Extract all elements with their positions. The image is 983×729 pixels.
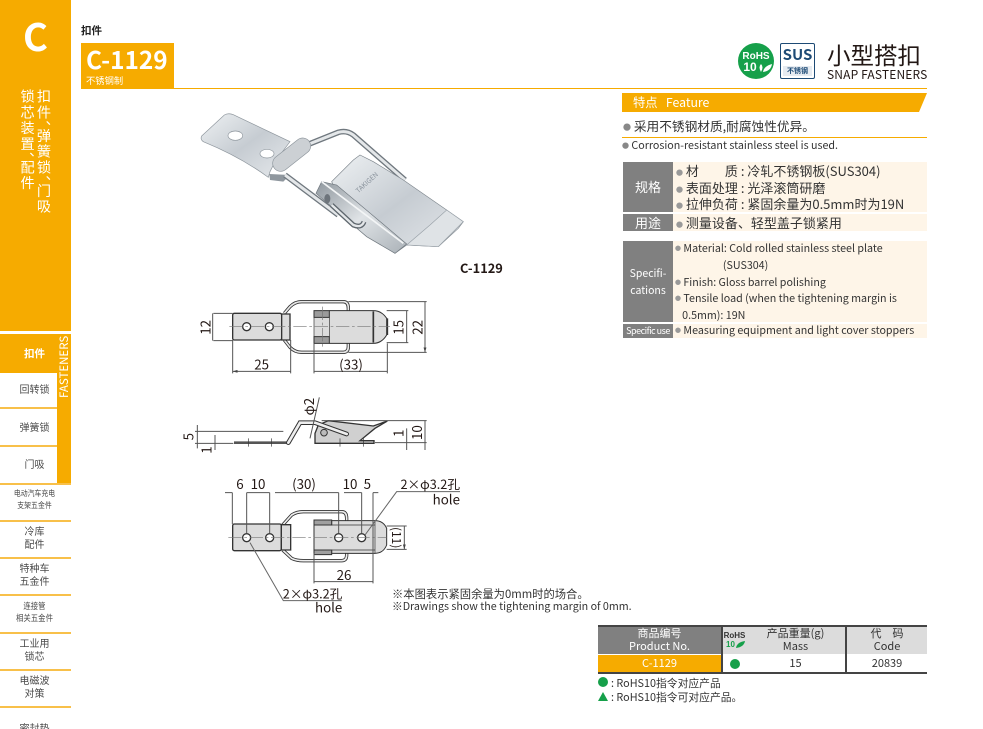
- spec list: [673, 162, 927, 212]
- feature text English: ● Corrosion-resistant stainless steel is used.: [622, 138, 838, 153]
- nav item: 相关五金件: [16, 612, 53, 624]
- legend circle text: : RoHS10指令对应产品: [611, 675, 721, 691]
- active nav item: 扣件: [24, 346, 45, 361]
- dimension labels: [178, 398, 426, 454]
- side view technical drawing: [178, 397, 427, 454]
- label: specifications: [623, 241, 673, 322]
- cell: product no: [598, 655, 721, 672]
- legend triangle: [598, 692, 608, 701]
- dimension labels: 1: [388, 430, 407, 437]
- cell: code: 20839: [872, 655, 902, 671]
- header: mass: [746, 627, 845, 654]
- panel: English specifications: [623, 241, 927, 338]
- header: RoHS: RoHS: [724, 631, 745, 640]
- nav item: 电磁波: [20, 672, 50, 687]
- header: mass: 产品重量(g): [767, 625, 824, 641]
- nav item: [14, 488, 55, 511]
- label: specs: 规格: [635, 177, 661, 196]
- label: specs: [623, 162, 673, 212]
- nav item: [20, 672, 50, 700]
- open view technical drawing: [225, 474, 460, 617]
- dimension labels: 15: [388, 320, 407, 335]
- use text: ● 测量设备、轻型盖子锁紧用: [676, 213, 842, 232]
- header: RoHS: 10: [726, 640, 735, 649]
- nav item: [24, 523, 44, 550]
- product code: C-1129: [86, 42, 168, 77]
- dimension labels: φ2: [299, 398, 318, 415]
- nav item: 支架五金件: [17, 500, 52, 511]
- badge: RoHS 10: 10: [743, 60, 757, 74]
- sidebar vertical category text: [18, 89, 54, 215]
- dimension labels: 5: [178, 433, 197, 440]
- dimension labels: 26: [337, 565, 351, 584]
- nav item: 工业用: [20, 635, 50, 650]
- panel: Chinese specifications: [623, 161, 927, 232]
- dimension labels: 10: [407, 425, 426, 440]
- product title English: SNAP FASTENERS: [827, 66, 927, 83]
- nav item: [20, 635, 50, 662]
- dimension lines: [195, 397, 427, 450]
- active nav item: [0, 334, 57, 373]
- drawing note: [392, 586, 632, 614]
- dimension labels: 2×φ3.2孔: [400, 474, 460, 493]
- label: use: [623, 214, 673, 231]
- nav item: 门吸: [24, 456, 44, 471]
- dimension labels: 1: [196, 446, 215, 454]
- legend: [598, 675, 742, 705]
- sidebar navigation: [0, 334, 72, 729]
- dimension labels: 10: [251, 474, 265, 493]
- dimension labels: 5: [364, 474, 371, 493]
- nav item: 特种车: [20, 560, 50, 575]
- cell: mass: 15: [789, 655, 802, 671]
- dimension labels: 2×φ3.2孔: [283, 583, 343, 602]
- nav item: 锁芯: [24, 648, 44, 662]
- label: specifications: cations: [630, 283, 666, 298]
- dimension labels: (11): [388, 527, 405, 548]
- header: product no: [598, 627, 721, 654]
- badge: SUS: [780, 43, 815, 79]
- spec list: ● 表面处理 : 光泽滚筒研磨: [676, 178, 825, 196]
- use text: [673, 214, 927, 231]
- dimension labels: hole: [433, 489, 460, 508]
- dimension labels: (30): [292, 474, 316, 493]
- dimension lines: [232, 493, 407, 583]
- dimension labels: [236, 474, 460, 617]
- spec list: ● 拉伸负荷 : 紧固余量为0.5mm时为19N: [676, 194, 904, 213]
- sidebar vertical category text: 锁芯装置 、 配件: [18, 89, 38, 192]
- dimension lines: [213, 302, 427, 373]
- use text: ● Measuring equipment and light cover stoppers: [675, 323, 914, 338]
- side rail: [316, 182, 407, 253]
- nav item: 电动汽车充电: [14, 488, 55, 499]
- category heading: 扣件: [81, 23, 102, 38]
- header: product no: Product No.: [629, 638, 690, 654]
- label: use: 用途: [635, 213, 661, 232]
- legend circle: [598, 677, 608, 687]
- header: product no: 商品编号: [638, 625, 682, 641]
- column rules: [721, 627, 723, 672]
- cell: RoHS mark: [730, 659, 740, 669]
- header: code: 代 码: [870, 625, 904, 641]
- roll: [281, 146, 303, 163]
- nav item: [20, 560, 50, 588]
- nav item: 回转锁: [20, 381, 50, 396]
- nav item: 对策: [24, 684, 44, 700]
- feature heading bar: 特点 Feature: [633, 93, 709, 111]
- product photo: latch: [201, 114, 463, 253]
- dimension labels: 25: [254, 354, 269, 373]
- product code box: [81, 43, 174, 88]
- feature text Chinese: ● 采用不锈钢材质,耐腐蚀性优异。: [623, 116, 815, 135]
- nav item: 五金件: [20, 572, 50, 588]
- section letter: C: [23, 7, 48, 62]
- nav item: 弹簧锁: [20, 419, 50, 434]
- dimension labels: [196, 320, 427, 373]
- header: code: [847, 627, 927, 654]
- dimension labels: 12: [196, 320, 215, 335]
- feature heading bar: [622, 93, 927, 112]
- badge: SUS: SUS: [783, 44, 812, 65]
- dimension labels: 10: [343, 474, 357, 493]
- part outline: [233, 302, 387, 352]
- wire bail: [307, 132, 405, 180]
- vertical FASTENERS band: FASTENERS: [56, 336, 72, 398]
- nav item: 冷库: [24, 523, 44, 538]
- stamped brand: TAKIGEN: [353, 169, 380, 195]
- SUS material strip: 不锈钢: [787, 66, 808, 76]
- spec list: ● 材 质 : 冷轧不锈钢板(SUS304): [676, 161, 881, 180]
- nav item: 配件: [24, 536, 44, 550]
- plate: [201, 114, 290, 177]
- dimension labels: 6: [236, 474, 244, 493]
- latch body: [332, 155, 463, 253]
- header: mass: Mass: [783, 638, 808, 654]
- dimension labels: hole: [315, 598, 342, 617]
- header: RoHS: [723, 627, 746, 654]
- sidebar vertical category text: 扣件 、 弹簧锁 、 门吸: [34, 89, 54, 215]
- cell: product no: C-1129: [642, 655, 677, 671]
- photo caption: C-1129: [460, 258, 503, 277]
- drawing note: ※Drawings show the tightening margin of 0mm.: [392, 598, 632, 614]
- header: code: Code: [874, 638, 900, 654]
- top view technical drawing: [196, 302, 427, 373]
- product title Chinese: 小型搭扣: [827, 37, 921, 71]
- drawing note: ※本图表示紧固余量为0mm时的场合。: [392, 586, 589, 602]
- nav item: [16, 600, 53, 624]
- dimension labels: 22: [408, 320, 427, 335]
- dimension labels: (33): [339, 354, 363, 373]
- spec list: ● Material: Cold rolled stainless steel plate (SUS304) ● Finish: Gloss barrel polishing ● Tensile load (when the tightening margin is 0.5mm): 19N: [675, 241, 897, 323]
- legend triangle text: : RoHS10指令可对应产品。: [611, 689, 742, 705]
- material label: 不锈钢制: [86, 73, 123, 87]
- label: specifications: Specifi-: [630, 266, 666, 281]
- sidebar top panel: [0, 0, 71, 331]
- badge: RoHS 10: RoHS: [742, 51, 770, 62]
- label: specific use: Specific use: [626, 324, 670, 337]
- nav item: 连接管: [23, 600, 46, 612]
- leader lines: [250, 492, 460, 601]
- part outline: [234, 421, 387, 447]
- part outline: [233, 512, 387, 561]
- vertical FASTENERS band: [57, 334, 71, 483]
- product table: [598, 625, 927, 674]
